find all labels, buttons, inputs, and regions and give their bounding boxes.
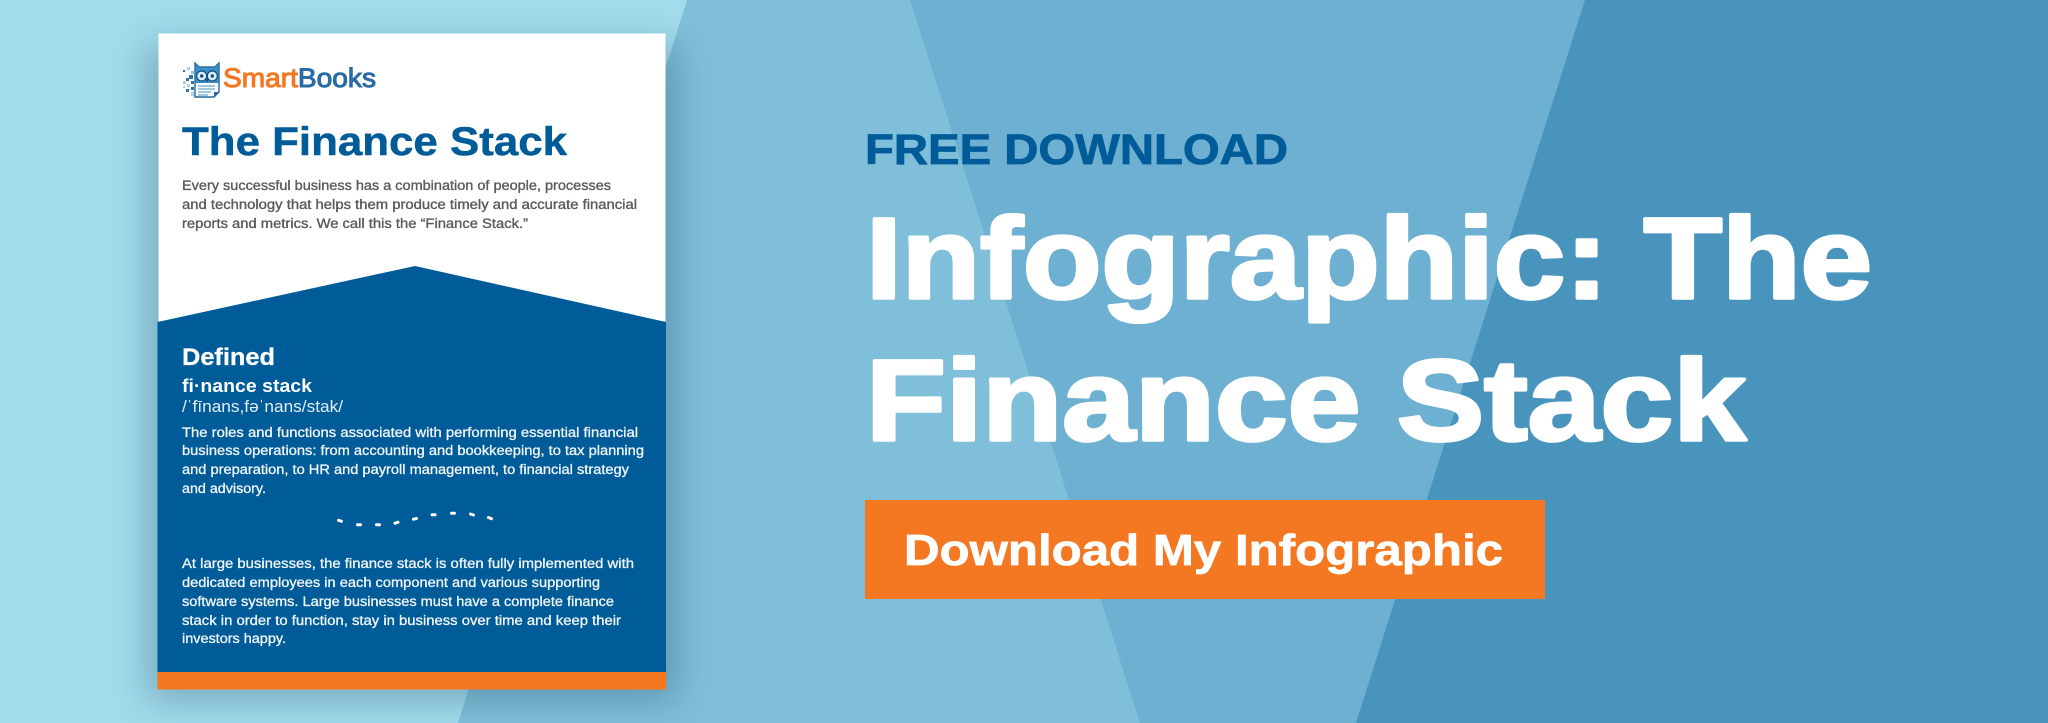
body text: At large businesses, the finance stack is often fully implemented with xyxy=(182,556,634,571)
definition text xyxy=(182,425,644,496)
dashed arc divider xyxy=(338,513,492,525)
term: finance stack: fi·nance stack xyxy=(182,376,313,396)
headline xyxy=(866,195,1872,465)
headline: Finance Stack xyxy=(866,337,1747,465)
card intro text: reports and metrics. We call this the “Finance Stack.” xyxy=(182,216,528,231)
blue chevron panel xyxy=(158,266,666,672)
card intro text: and technology that helps them produce timely and accurate financial xyxy=(182,197,637,212)
logo: SmartBooks xyxy=(183,63,376,97)
card title: The Finance Stack xyxy=(182,120,568,164)
button: download my infographic: Download My Infographic xyxy=(904,526,1503,575)
orange footer bar xyxy=(158,672,666,690)
card shadow xyxy=(148,46,676,700)
eyebrow: free download: FREE DOWNLOAD xyxy=(865,126,1288,174)
logo wordmark: SmartBooks xyxy=(223,63,376,93)
panel: infographic preview card xyxy=(158,34,666,690)
button: download my infographic xyxy=(865,500,1545,599)
body text: dedicated employees in each component and various supporting xyxy=(182,575,600,590)
body text: stack in order to function, stay in business over time and keep their xyxy=(182,613,622,628)
card intro text: Every successful business has a combination of people, processes xyxy=(182,178,611,193)
definition text: and preparation, to HR and payroll management, to financial strategy xyxy=(182,462,629,477)
definition text: and advisory. xyxy=(182,481,266,496)
definition text: business operations: from accounting and bookkeeping, to tax planning xyxy=(182,443,644,458)
body text xyxy=(182,556,634,646)
body text: software systems. Large businesses must have a complete finance xyxy=(182,594,614,609)
icon: owl book xyxy=(183,63,219,97)
pronunciation: /ˈfīnans,fəˈnans/stak/ xyxy=(182,397,343,416)
definition text: The roles and functions associated with performing essential financial xyxy=(182,425,638,440)
card intro text xyxy=(182,178,637,231)
headline: Infographic: The xyxy=(866,195,1872,323)
heading: Defined: Defined xyxy=(182,344,275,371)
body text: investors happy. xyxy=(182,631,286,646)
